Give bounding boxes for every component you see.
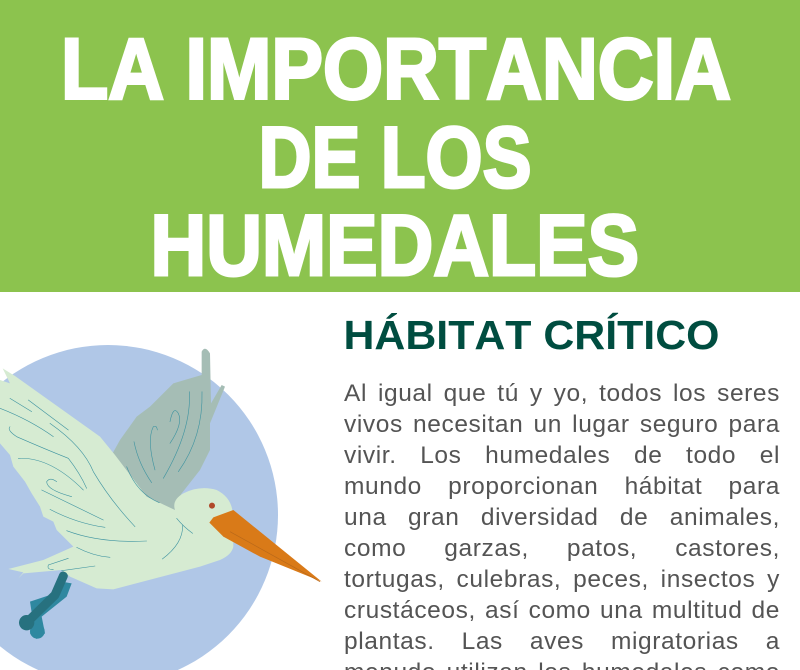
eye [209,503,215,509]
body text: vivos necesitan un lugar seguro para [344,411,780,438]
title [61,22,731,294]
title: LA IMPORTANCIA [61,22,731,117]
blue circle [0,345,278,670]
pelican [0,349,322,639]
body text: una gran diversidad de animales, [344,504,780,531]
body and near wing [0,368,233,589]
body text: Al igual que tú y yo, todos los seres [344,380,780,407]
feet [19,576,72,639]
feather lines [0,392,202,571]
title: DE LOS [258,109,532,205]
beak [209,510,322,582]
body text [344,380,780,670]
body text: tortugas, culebras, peces, insectos y [344,566,780,593]
body text: vivir. Los humedales de todo el [344,442,780,469]
heading: habitat critico: HÁBITAT CRÍTICO [344,312,719,358]
body text: crustáceos, así como una multitud de [344,597,780,624]
leg top [59,572,68,580]
body text: como garzas, patos, castores, [344,535,780,562]
title: HUMEDALES [150,198,639,294]
far wing [112,349,225,520]
body text: plantas. Las aves migratorias a [344,628,780,655]
body text: mundo proporcionan hábitat para [344,473,780,500]
